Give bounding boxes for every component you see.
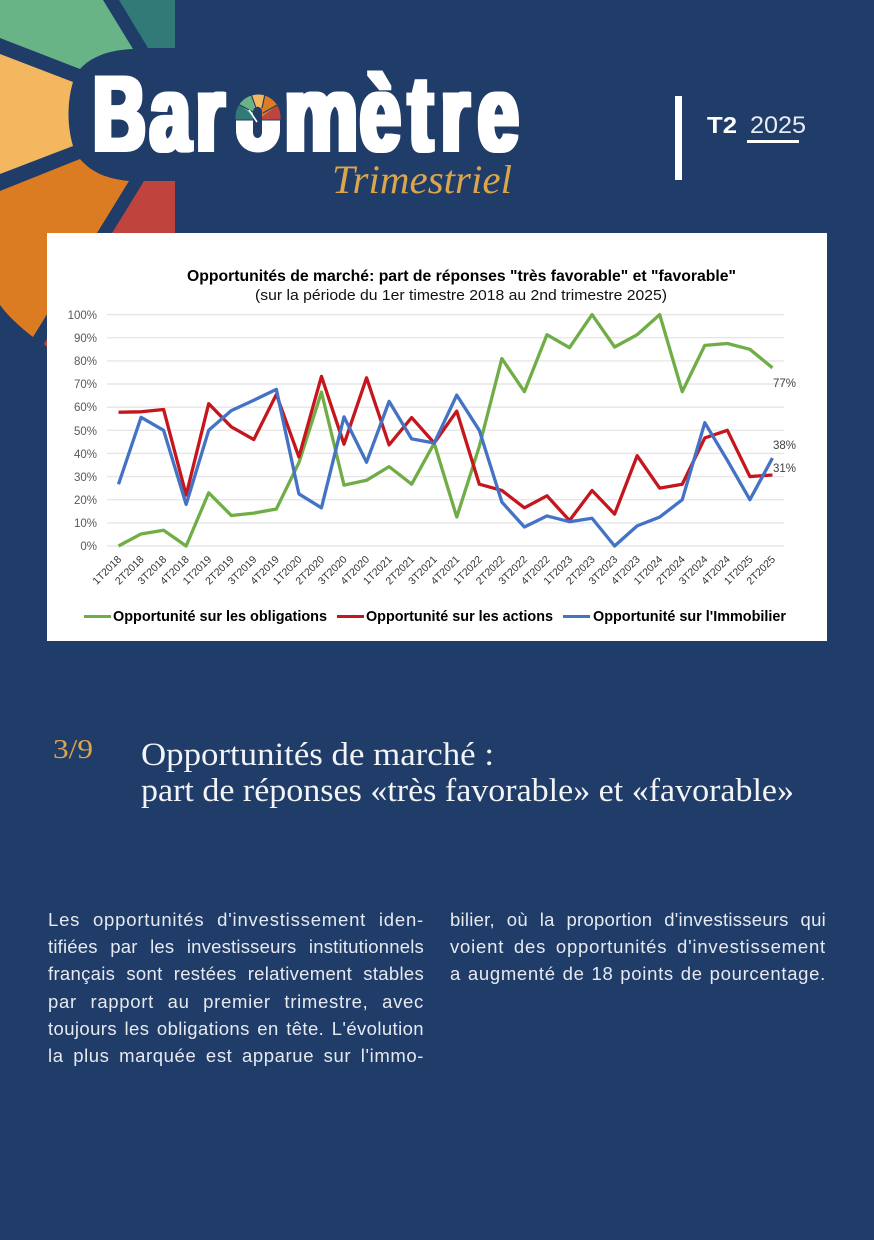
page artwork: header, chart and heading [0, 0, 827, 808]
logo: Baromètre: m [284, 55, 358, 174]
body text: left column: français sont restées relativement stables [48, 963, 424, 984]
x axis labels [90, 554, 778, 587]
y axis labels: 0% [80, 541, 97, 553]
y axis labels: 70% [74, 379, 97, 391]
body text: right column: voient des opportunités d'investissement [450, 936, 826, 957]
body text: left column: la plus marquée est apparue sur l'immo- [48, 1045, 424, 1066]
y axis labels: 60% [74, 402, 97, 414]
section heading [141, 737, 794, 809]
y axis labels: 90% [74, 333, 97, 345]
x axis labels: 1T2021 [361, 554, 395, 587]
x axis labels: 1T2018 [90, 554, 124, 587]
y axis labels: 80% [74, 356, 97, 368]
x axis labels: 1T2019 [181, 554, 214, 587]
x axis labels: 3T2018 [136, 554, 169, 587]
y axis labels: 30% [74, 472, 97, 484]
body text: left column: Les opportunités d'investissement iden- [48, 909, 424, 930]
logo: Baromètre [94, 70, 519, 153]
body text: right column: bilier, où la proportion d'investisseurs qui [450, 909, 826, 930]
x axis labels: 3T2022 [496, 554, 530, 587]
body text: left column: toujours les obligations en tête. L'évolution [48, 1018, 424, 1039]
data series [118, 315, 772, 546]
x axis labels: 4T2024 [699, 554, 733, 587]
x axis labels: 4T2019 [248, 554, 282, 587]
x axis labels: 4T2022 [519, 554, 553, 587]
chart title [187, 268, 736, 304]
x axis labels: 3T2023 [587, 554, 620, 587]
end-of-line value labels: 38% [773, 440, 796, 452]
logo: Baromètre: ètre [360, 55, 518, 174]
logo subtitle: Trimestriel: Trimestriel [332, 157, 512, 202]
chart legend [84, 608, 786, 625]
section heading: part de réponses «très favorable» et «favorable» [141, 773, 794, 809]
y axis labels: 10% [74, 518, 97, 530]
body text: left column [48, 909, 424, 1066]
edition block: T2 2025: 2025 [750, 112, 806, 139]
body text: left column: tifiées par les investisseurs institutionnels [48, 936, 424, 957]
x axis labels: 4T2021 [429, 554, 462, 587]
logo: Baromètre: o [244, 96, 272, 163]
x axis labels: 3T2021 [406, 554, 440, 587]
x axis labels: 1T2023 [541, 554, 575, 587]
edition block: T2 2025 [675, 96, 806, 180]
body text: right column [450, 909, 826, 984]
x axis labels: 2T2021 [384, 554, 417, 587]
y axis labels: 20% [74, 495, 97, 507]
x axis labels: 4T2023 [609, 554, 643, 587]
x axis labels: 2T2025 [744, 554, 778, 587]
end-of-line value labels: 77% [773, 378, 796, 390]
body text: right column: a augmenté de 18 points de pourcentage. [450, 963, 826, 984]
x axis labels: 2T2024 [654, 554, 688, 587]
x axis labels: 2T2023 [564, 554, 598, 587]
chart title: Opportunités de marché: part de réponses "très favorable" et "favorable" [187, 268, 736, 285]
series: obligations [118, 315, 772, 546]
x axis labels: 2T2020 [293, 554, 327, 587]
x axis labels: 2T2019 [203, 554, 237, 587]
x axis labels: 1T2025 [722, 554, 756, 587]
edition block: T2 2025: T2 [707, 112, 737, 138]
x axis labels: 4T2020 [338, 554, 372, 587]
y axis labels: 50% [74, 426, 97, 438]
panel: line chart [47, 233, 827, 641]
y axis labels [68, 310, 97, 553]
logo: Baromètre: Bar [93, 55, 224, 174]
x axis labels: 1T2022 [451, 554, 485, 587]
end-of-line value labels [773, 378, 796, 475]
chart legend: Opportunité sur les actions [366, 608, 553, 625]
chart legend: Opportunité sur l'Immobilier [593, 608, 786, 625]
y axis labels: 100% [68, 310, 97, 322]
x axis labels: 2T2022 [474, 554, 508, 587]
x axis labels: 4T2018 [158, 554, 192, 587]
series: immobilier [118, 389, 772, 546]
x axis labels: 1T2020 [271, 554, 305, 587]
x axis labels: 1T2024 [632, 554, 665, 587]
decorative sunburst gauge [0, 0, 175, 347]
x axis labels: 3T2019 [226, 554, 260, 587]
end-of-line value labels: 31% [773, 463, 796, 475]
y axis labels: 40% [74, 449, 97, 461]
series: actions [118, 376, 772, 521]
x axis labels: 3T2024 [677, 554, 711, 587]
icon: gauge in the letter o [236, 94, 280, 152]
x axis labels: 3T2020 [316, 554, 350, 587]
section heading: Opportunités de marché : [141, 737, 494, 773]
page number: 3/9 [53, 734, 93, 764]
x axis labels: 2T2018 [113, 554, 147, 587]
chart title: (sur la période du 1er timestre 2018 au 2nd trimestre 2025) [255, 287, 667, 304]
body text: left column: par rapport au premier trimestre, avec [48, 991, 424, 1012]
chart legend: Opportunité sur les obligations [113, 608, 327, 625]
